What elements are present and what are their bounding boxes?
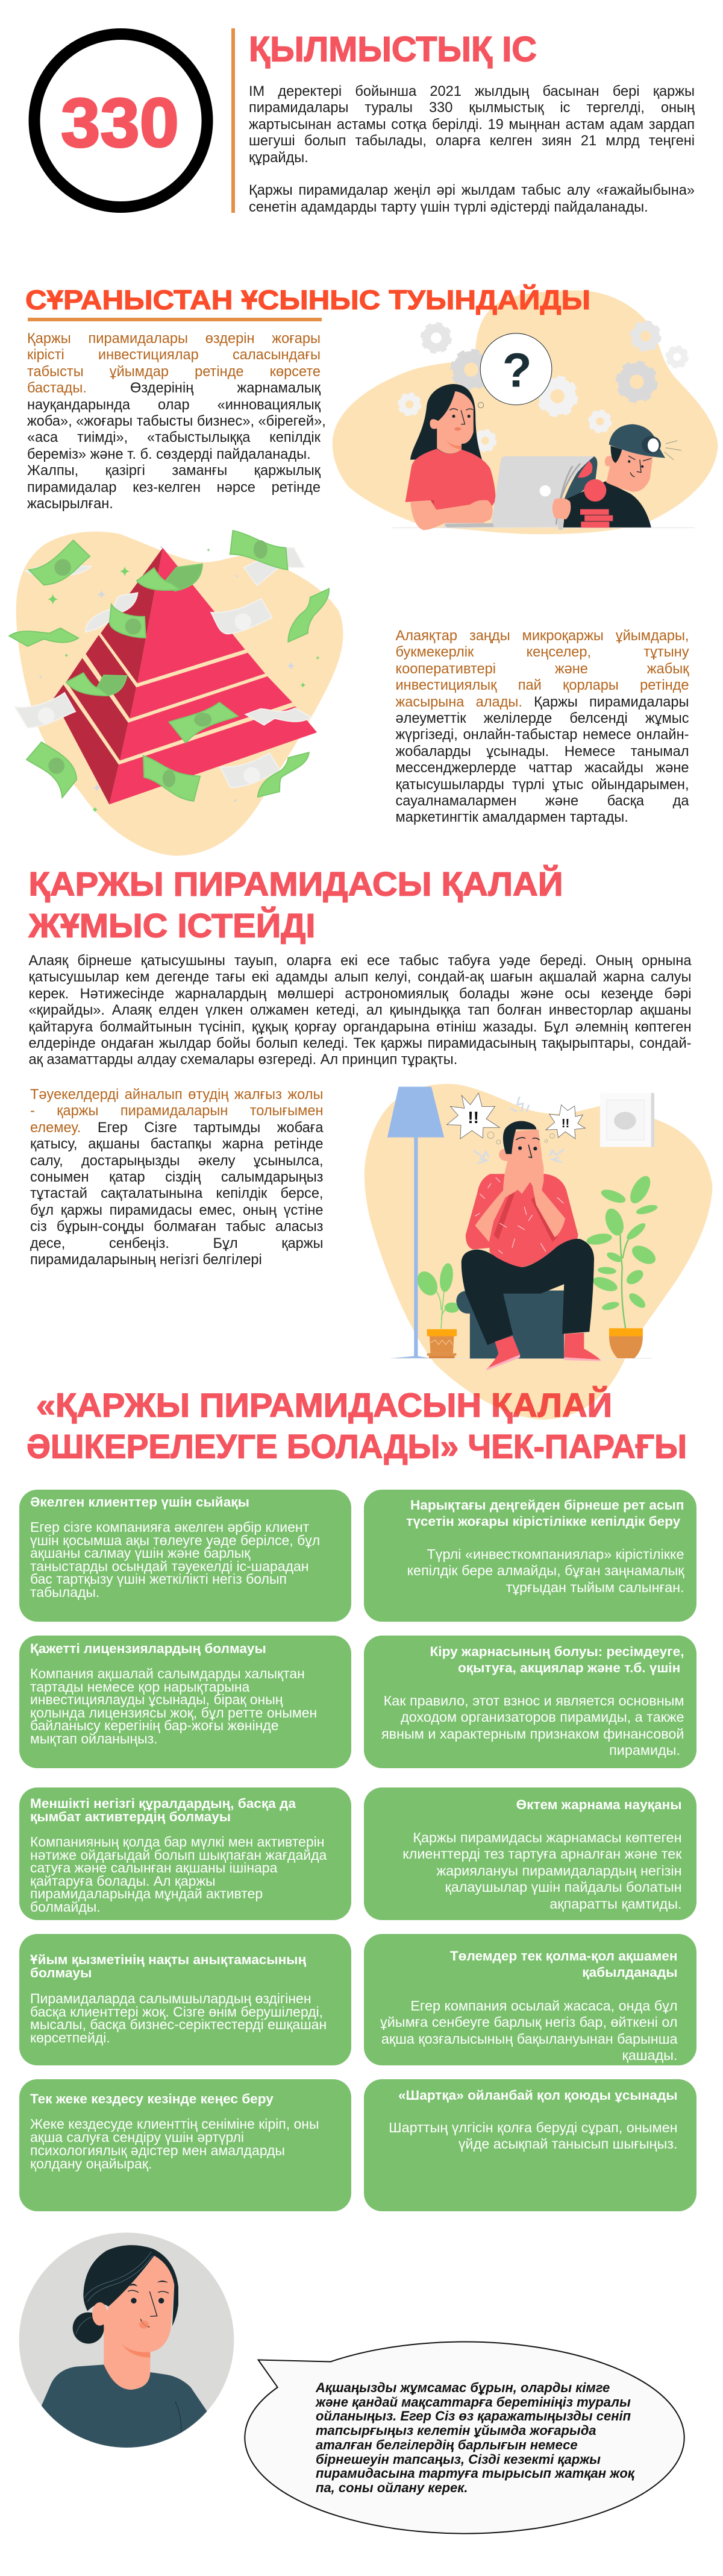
text block: how it works: керек. Нәтижесінде жарналардың мөлшері астрономиялық болады және осы кезеңде бәрі	[29, 986, 692, 1002]
text block: fraudsters hide: сауалнамалармен және басқа да	[395, 793, 689, 809]
text block: avoiding risks: тұтастай сақталатынына кепілдік берсе,	[30, 1186, 323, 1201]
speech bubble text: аталған белгілердің барлығын немесе	[316, 2437, 578, 2452]
floor line	[393, 527, 694, 528]
section heading: checklist title	[27, 1386, 687, 1465]
exclamation bursts	[447, 1093, 585, 1164]
card text: қайтаруға болады. Ал қаржы	[30, 1873, 216, 1889]
text block: fraudsters hide: маркетингтік амалдармен тартады.	[395, 810, 628, 825]
card text: ақша салуға сендіру үшін әртүрлі	[30, 2129, 244, 2145]
big number 330: 330	[61, 84, 179, 162]
card text: Компанияның қолда бар мүлкі мен активтерін	[30, 1834, 324, 1850]
text block: how it works: қатысушылар кем дегенде тағы екі адамды алып келуі, сондай-ақ шағын ақшалай жарна салуы	[29, 969, 692, 985]
card heading: оқытуға, акциялар және т.б. үшін	[458, 1660, 680, 1675]
text block: avoiding risks: пирамидаларының негізгі белгілері	[30, 1252, 262, 1268]
text block: demand creates supply: береміз» және т. б. сөздерді пайдаланады.	[27, 447, 311, 462]
text block: avoiding risks: елемеу. Егер Сізге тартымды жобаға	[30, 1120, 323, 1136]
card text: басқа клиенттері жоқ. Сізге өнім берушілерді,	[30, 2004, 323, 2020]
text block: how it works: ақ азаматтарды алдау схемалары өзгереді. Ал принцип тұрақты.	[29, 1052, 457, 1068]
card text: үшін қосымша ақы төлеуге уәде берілсе, бұл	[30, 1532, 320, 1548]
card text: явным и характерным признаком финансовой	[381, 1726, 684, 1742]
card text	[380, 1998, 677, 2063]
text block: demand creates supply: науқандарында олар «инновациялық	[27, 397, 321, 413]
card: cash only	[364, 1934, 696, 2065]
text block: fraudsters hide: инвестициялық пай қорлары ретінде	[395, 678, 689, 693]
worried man	[462, 1121, 601, 1370]
card text: Пирамидаларда салымшылардың өздігінен	[30, 1991, 311, 2006]
sofa	[456, 1291, 564, 1358]
card text: таныстарды осындай тәуекелді іс-шарадан	[30, 1558, 309, 1574]
card text: пирамиды.	[609, 1742, 680, 1758]
text block: criminal cases: құрайды.	[249, 150, 308, 166]
card text: бас тартқызу үшін жеткілікті негіз болып	[30, 1571, 287, 1587]
text block: avoiding risks: Тәуекелдерді айналып өтудің жалғыз жолы	[30, 1087, 323, 1103]
text block: demand creates supply: Қаржы пирамидалары өздерін жоғары	[27, 331, 321, 347]
illustration: worried man on a sofa	[365, 1084, 712, 1420]
card heading	[30, 1796, 296, 1824]
card text: нәтиже ойдағыдай болып шықпаған жағдайда	[30, 1847, 327, 1863]
text block: how it works: «қирайды». Алаяқ елден үлкен олжамен кетеді, ал қиындыққа тап болған инвесторлар ақшаны	[29, 1003, 692, 1018]
card text	[30, 1666, 317, 1746]
card: no licences	[19, 1636, 351, 1768]
text block: avoiding risks	[30, 1087, 323, 1268]
card text	[402, 1830, 682, 1912]
card text: қалаушылар үшін пайдалы болатын	[445, 1879, 682, 1895]
section heading: checklist title: «ҚАРЖЫ ПИРАМИДАСЫН ҚАЛАЙ	[36, 1386, 612, 1424]
card heading: Кіру жарнасының болуы: ресімдеуге,	[430, 1644, 684, 1659]
text block: demand creates supply: жасырылған.	[27, 496, 113, 512]
card text: Как правило, этот взнос и является основным	[384, 1693, 684, 1708]
card text: Компания ақшалай салымдарды халықтан	[30, 1666, 305, 1681]
speech bubble text	[315, 2380, 635, 2495]
card text: сатуға және салынған ақшаны ішінара	[30, 1860, 277, 1875]
title: ҚЫЛМЫСТЫҚ ІС	[249, 30, 537, 69]
card text: ақшаны салмау үшін және барлық	[30, 1545, 250, 1561]
text block: demand creates supply: жоба», «жоғары табысты бизнес», «бірегей»,	[27, 414, 326, 429]
text block: avoiding risks: салу, достарыңызды әкелу ұсынылса,	[30, 1153, 323, 1169]
card: no assets	[19, 1787, 351, 1920]
card: guaranteed high income	[364, 1490, 696, 1622]
floor lamp	[387, 1087, 444, 1358]
text block: demand creates supply: бастады. Өздерінің жарнамалық	[27, 380, 321, 396]
card text: Түрлі «инвесткомпаниялар» кірістілікке	[427, 1546, 684, 1562]
text block: how it works	[29, 953, 692, 1068]
laptop peeled open	[444, 456, 594, 530]
vertical divider	[231, 28, 235, 213]
card text: пирамидаларында мұндай активтер	[30, 1886, 263, 1901]
section heading: demand creates supply: СҰРАНЫСТАН ҰСЫНЫС ТУЫНДАЙДЫ	[25, 285, 590, 315]
card heading: түсетін жоғары кірістілікке кепілдік беру	[406, 1514, 680, 1529]
text block: how it works: Алаяқ бірнеше қатысушыны тауып, оларға екі есе табыс табуға уәде береді. Оның орнына	[29, 953, 692, 969]
card heading: Төлемдер тек қолма-қол ақшамен	[450, 1948, 677, 1963]
card text: тұрғыдан тыйым салынған.	[506, 1579, 684, 1595]
card text: жариялануы пирамидалардың негізін	[436, 1863, 682, 1878]
card heading: қымбат активтердің болмауы	[30, 1809, 231, 1824]
card text: қашады.	[622, 2047, 677, 2063]
text block: demand creates supply	[27, 331, 326, 512]
card text: қолында лицензиясы жоқ, бұл ретте онымен	[30, 1705, 317, 1721]
card heading	[30, 1952, 306, 1980]
text block: how it works: елдерінде ондаған жылдар бойы болып келеді. Тек қаржы пирамидасының тақырыптары, сондай-	[29, 1036, 692, 1051]
wall picture	[600, 1093, 654, 1147]
text block: fraudsters hide: жасырына алады. Қаржы пирамидалары	[395, 694, 689, 710]
text block: criminal cases: IM деректері бойынша 2021 жылдың басынан бері қаржы	[249, 84, 695, 99]
card text: үйде асықпай танысып шығыңыз.	[459, 2136, 677, 2152]
text block: criminal cases: сенетін адамдарды тарту үшін түрлі әдістерді пайдаланады.	[249, 200, 648, 215]
text block: fraudsters hide: әлеуметтік желілерде белсенді жұмыс	[395, 711, 689, 726]
text block: demand creates supply: кірісті инвестициялар саласындағы	[27, 347, 321, 363]
card text: Егер сізге компанияға әкелген әрбір клиент	[30, 1519, 309, 1535]
speech bubble text: және қандай мақсаттарға беретініңіз туралы	[316, 2395, 631, 2410]
text block: criminal cases: Қаржы пирамидалар жеңіл әрі жылдам табыс алу «ғажайыбына»	[249, 183, 695, 198]
card: referral bonus	[19, 1490, 351, 1622]
card text: қолдану оңайырақ.	[30, 2156, 152, 2171]
exclamation bursts: !!	[468, 1108, 479, 1127]
section heading: checklist title: ӘШКЕРЕЛЕУГЕ БОЛАДЫ» ЧЕК-ПАРАҒЫ	[27, 1428, 687, 1465]
text block: fraudsters hide	[395, 628, 689, 825]
text block: criminal cases: жартысынан астамы сотқа берілді. 19 мыңнан астам адам зардап	[249, 117, 695, 133]
text block: criminal cases	[249, 84, 695, 215]
speech bubble text: па, соны ойлану керек.	[316, 2480, 468, 2495]
text block: fraudsters hide: Алаяқтар заңды микроқаржы ұйымдары,	[395, 628, 689, 644]
card heading: Ұйым қызметінің нақты анықтамасының	[30, 1952, 306, 1967]
card text: көрсетпейді.	[30, 2030, 110, 2045]
card: aggressive advertising	[364, 1787, 696, 1920]
card text: байланысу керегінің бар-жоғы жөнінде	[30, 1718, 278, 1733]
card text	[30, 2116, 319, 2171]
section heading: how a pyramid works	[28, 864, 563, 944]
card text: доходом организаторов пирамиды, а также	[401, 1709, 684, 1725]
card text	[30, 1519, 320, 1600]
left potted plant	[413, 1262, 460, 1358]
right potted plant	[586, 1173, 659, 1358]
card: sign without thinking	[364, 2079, 696, 2211]
text block: demand creates supply: табысты ұйымдар ретінде көрсете	[27, 364, 321, 380]
card heading: Меншікті негізгі құралдардың, басқа да	[30, 1796, 296, 1811]
card text: болмайды.	[30, 1899, 101, 1915]
card text: инвестициялауды ұсынады, бірақ оның	[30, 1692, 283, 1707]
coin	[584, 479, 606, 502]
card heading: Қажетті лицензиялардың болмауы	[30, 1641, 266, 1656]
text block: fraudsters hide: мессенджерлерде чаттар жасайды және	[395, 760, 689, 776]
peach blob	[16, 532, 343, 856]
text block: fraudsters hide: жобаларды ұсынады. Немесе танымал	[395, 744, 689, 760]
floor line	[390, 1358, 652, 1359]
card text	[407, 1546, 684, 1595]
woman	[405, 384, 496, 530]
text block: avoiding risks: десе, сенбеңіз. Бұл қаржы	[30, 1236, 323, 1252]
card text: ақпаратты қамтиды.	[549, 1896, 682, 1912]
card heading: Нарықтағы деңгейден бірнеше рет асып	[410, 1497, 684, 1513]
card heading: Әкелген клиенттер үшін сыйақы	[30, 1494, 249, 1510]
text block: fraudsters hide: букмекерлік кеңселер, тұтыну	[395, 644, 689, 660]
text block: demand creates supply: пирамидалар кез-келген нәрсе ретінде	[27, 480, 321, 496]
card text: табылады.	[30, 1584, 99, 1600]
card: entry fee	[364, 1636, 696, 1768]
card text: ақша қозғалысының бақылануынан барынша	[381, 2031, 677, 2047]
text block: avoiding risks: сонымен қатар сіздің салымдарыңыз	[30, 1170, 323, 1185]
pyramid tiers	[54, 548, 317, 804]
card text: тартады немесе қор нарықтарына	[30, 1679, 249, 1695]
thought bubble with question mark	[478, 333, 552, 408]
text block: fraudsters hide: жүргізеді, онлайн-табыстар немесе онлайн-	[395, 727, 689, 743]
green banknotes	[9, 531, 329, 801]
card heading: «Шартқа» ойланбай қол қоюды ұсынады	[398, 2088, 677, 2103]
section heading: how a pyramid works: ҚАРЖЫ ПИРАМИДАСЫ ҚАЛАЙ	[29, 864, 563, 903]
peach blob	[365, 1084, 712, 1420]
card text: Қаржы пирамидасы жарнамасы көптеген	[413, 1830, 682, 1845]
card text	[389, 2120, 677, 2152]
gears	[399, 323, 687, 450]
illustration: woman and miner behind laptop	[333, 291, 718, 534]
card text	[381, 1693, 684, 1758]
speech bubble	[245, 2342, 684, 2534]
card text	[30, 1991, 327, 2045]
text block: avoiding risks: бұл қаржы пирамидасы емес, оның үстіне	[30, 1203, 323, 1218]
illustration: pyramid with flying banknotes	[9, 531, 343, 856]
text block: demand creates supply: Жалпы, қазіргі заманғы қаржылық	[27, 463, 321, 479]
card text	[30, 1834, 327, 1915]
card text: Егер компания осылай жасаса, онда бұл	[410, 1998, 677, 2014]
card text: мысалы, басқа бизнес-серіктестерді ешқашан	[30, 2017, 327, 2032]
card: no clear activity	[19, 1934, 351, 2065]
sparkles	[39, 545, 320, 813]
thought bubble with question mark: ?	[502, 344, 532, 397]
heading underline	[28, 318, 322, 321]
speech bubble text: бірнешеуін тапсаңыз, Сізді кезекті қаржы	[316, 2452, 601, 2467]
card heading	[406, 1497, 684, 1529]
card heading: болмауы	[30, 1965, 92, 1980]
card heading: Тек жеке кездесу кезінде кеңес беру	[30, 2091, 274, 2106]
card heading	[430, 1644, 684, 1675]
peach blob	[333, 291, 718, 534]
white banknotes	[15, 548, 311, 788]
speech bubble text: тапсырғыңыз келетін ұйымда жоғарыда	[316, 2423, 596, 2438]
card text: кепілдік бере алмайды, бұған заңнамалық	[407, 1563, 684, 1578]
card text: психологиялық әдістер мен амалдарды	[30, 2143, 285, 2158]
card heading: Өктем жарнама науқаны	[516, 1797, 682, 1812]
text block: criminal cases: шегуші болып табылады, оларға келген зиян 21 млрд теңгені	[249, 133, 695, 149]
speech bubble text: ойланыңыз. Егер Сіз өз қаражатыңызды сеніп	[316, 2408, 631, 2423]
text block: avoiding risks: қатысу, ақшаны бастапқы жарна ретінде	[30, 1136, 323, 1152]
card text: мықтап ойланыңыз.	[30, 1731, 158, 1746]
icon: 330 ring	[34, 34, 207, 207]
card heading: қабылданады	[582, 1965, 677, 1980]
illustration: woman avatar	[19, 2232, 234, 2452]
card text: ұйымға сенбеуге барлық негіз бар, өйткені ол	[380, 2014, 677, 2030]
exclamation bursts: !!	[562, 1117, 569, 1130]
text block: criminal cases: пирамидалары туралы 330 қылмыстық іс тергелді, оның	[249, 100, 695, 116]
text block: demand creates supply: «аса тиімді», «табыстылыққа кепілдік	[27, 430, 321, 446]
text block: fraudsters hide: кооперативтері және жабық	[395, 661, 689, 677]
speech bubble text: пирамидасына тартуға тырысып жатқан жоқ	[316, 2466, 634, 2481]
section heading: how a pyramid works: ЖҰМЫС ІСТЕЙДІ	[28, 907, 315, 944]
card: in-person advice only	[19, 2079, 351, 2211]
card text: клиенттерді тез тартуға арналған және тек	[402, 1846, 682, 1862]
card text: Жеке кездесуде клиенттің сеніміне кіріп, оны	[30, 2116, 319, 2132]
card text: Шарттың үлгісін қолға беруді сұрап, онымен	[389, 2120, 677, 2135]
text block: how it works: қайтаруға болмайтынын түсініп, құқық қорғау органдарына өтініш жазады. Бұл әлемнің көптеген	[29, 1019, 692, 1035]
speech bubble text: Ақшаңызды жұмсамас бұрын, оларды кімге	[316, 2380, 610, 2395]
text block: avoiding risks: - қаржы пирамидаларын толығымен	[30, 1103, 323, 1119]
text block: fraudsters hide: қатысушыларды түрлі ұтыс ойындарымен,	[395, 777, 689, 793]
text block: avoiding risks: сіз бұрын-соңды болмаған табыс аласыз	[30, 1219, 323, 1235]
card heading	[450, 1948, 677, 1980]
miner	[563, 424, 681, 527]
